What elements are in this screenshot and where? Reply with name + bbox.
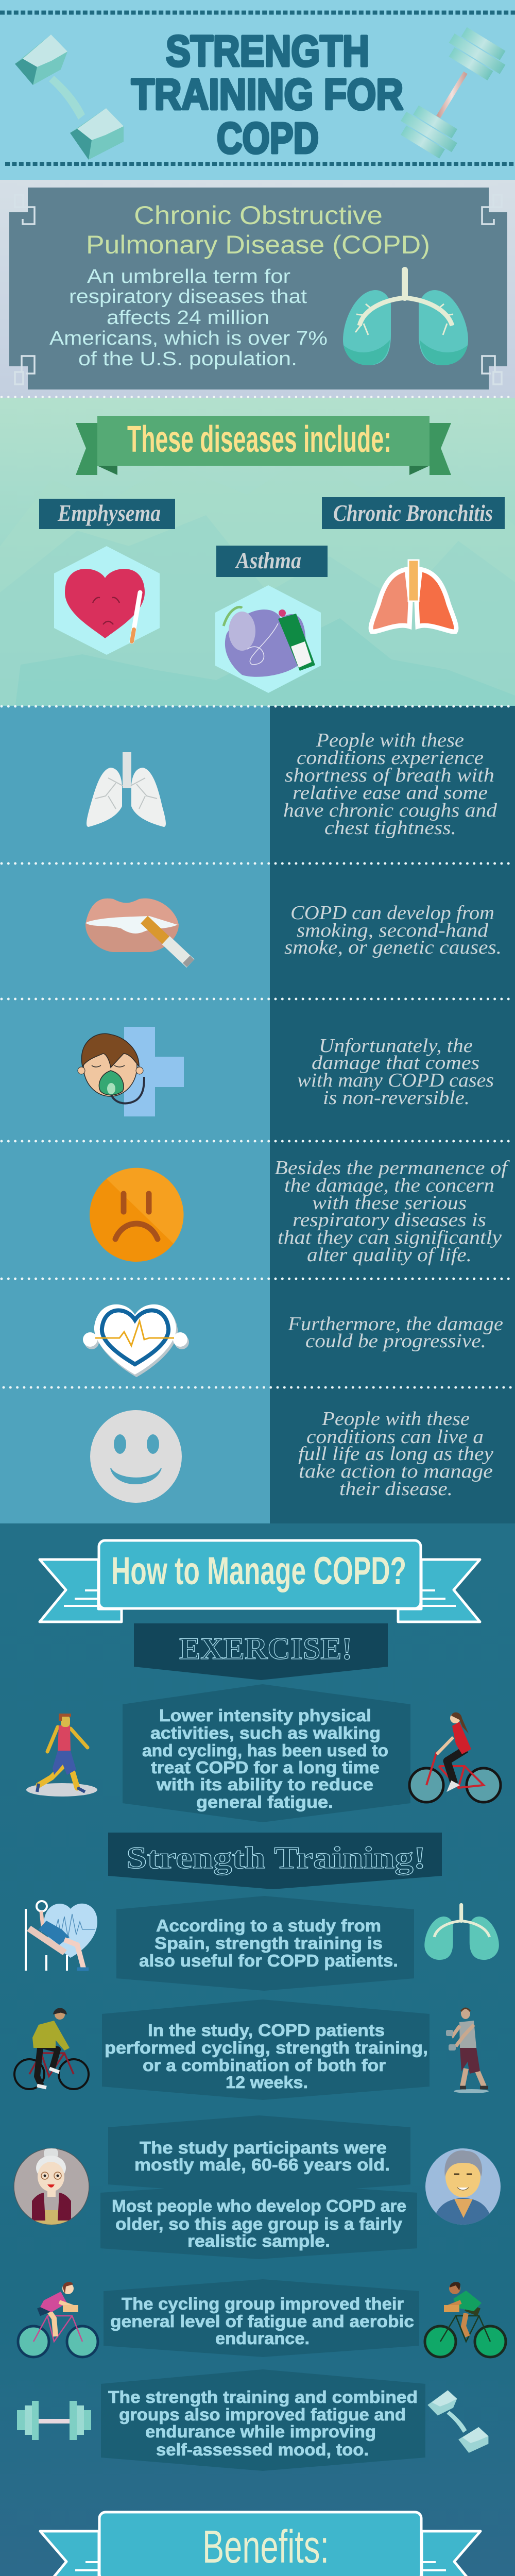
label: asthma: Asthma [234, 547, 301, 573]
heading: exercise: EXERCISE! [179, 1632, 352, 1666]
callout: strength group [101, 2369, 425, 2471]
text: progressive: could be progressive. [305, 1330, 486, 1352]
title [131, 27, 403, 162]
panel: header [0, 0, 515, 180]
text: causes: smoke, or genetic causes. [284, 937, 502, 958]
text: quality of life: the damage, the concern [284, 1175, 494, 1196]
callout: cycling group [104, 2279, 419, 2357]
text block: Americans, which is over 7% [49, 328, 328, 349]
text: quality of life: respiratory diseases is [293, 1209, 486, 1231]
text: causes: COPD can develop from [290, 902, 494, 924]
icon: cyclist pink [18, 2282, 98, 2357]
text: irreversible: damage that comes [312, 1052, 479, 1074]
callout: study design: In the study, COPD patients [148, 2021, 385, 2040]
panel: how to manage COPD [0, 1523, 515, 2576]
icon: heartbeat badge [83, 1304, 189, 1377]
icon: white lungs [87, 752, 166, 827]
panel: diseases [0, 397, 515, 706]
icon: man with oxygen mask [78, 1027, 184, 1116]
text: manage disease: their disease. [339, 1478, 453, 1500]
callout: realistic sample: older, so this age group is a fairly [115, 2214, 403, 2233]
icon: smile face [90, 1410, 182, 1503]
icon: barbell front [17, 2401, 91, 2440]
icon: sad face [90, 1168, 184, 1262]
heading: strength training: Strength Training! [126, 1841, 426, 1875]
callout: strength group: self-assessed mood, too. [156, 2440, 369, 2459]
icon: cyclist in red [409, 1713, 501, 1802]
text: manage disease [298, 1408, 493, 1500]
text: irreversible: Unfortunately, the [319, 1035, 473, 1057]
text: symptoms: shortness of breath with [285, 765, 494, 786]
icon: lungs [343, 270, 468, 365]
callout: study design: or a combination of both for [143, 2056, 386, 2075]
callout: lower intensity: with its ability to reduce [156, 1775, 373, 1794]
panel: COPD definition [0, 180, 515, 398]
icon: lungs small [424, 1905, 499, 1960]
callout: realistic sample [100, 2189, 417, 2259]
icon: bench press with heart [26, 1901, 97, 1971]
callout: study from Spain [116, 1896, 414, 1991]
text: symptoms: People with these [316, 730, 464, 751]
text: progressive: Furthermore, the damage [287, 1313, 503, 1335]
callout: lower intensity: and cycling, has been used to [142, 1741, 388, 1760]
icon: barbell [394, 23, 512, 162]
callout: study from Spain: also useful for COPD patients. [139, 1951, 398, 1970]
callout: cycling group: general level of fatigue and aerobic [110, 2312, 414, 2331]
icon: cyclist green [425, 2282, 506, 2357]
banner: benefits [40, 2512, 480, 2576]
callout: realistic sample: Most people who develop COPD are [112, 2196, 406, 2215]
icon: dumbbell [15, 35, 124, 160]
callout: strength group: endurance while improving [145, 2422, 376, 2441]
icon: walker [26, 1714, 97, 1797]
callout: study from Spain: According to a study from [156, 1916, 381, 1935]
callout: lower intensity [123, 1684, 410, 1822]
panel: facts rows [0, 706, 515, 1523]
callout: participants: The study participants were [140, 2138, 387, 2157]
callout: cycling group: endurance. [215, 2329, 310, 2348]
label: emphysema: Emphysema [57, 500, 161, 526]
text: symptoms: relative ease and some [293, 782, 488, 804]
callout: realistic sample: realistic sample. [187, 2231, 330, 2250]
text: manage disease: take action to manage [299, 1461, 493, 1482]
text: irreversible [297, 1035, 494, 1109]
text: irreversible: is non-reversible. [323, 1087, 470, 1109]
icon: lips with cigarette [85, 899, 191, 963]
text block: affects 24 million [107, 307, 269, 329]
callout: strength group: The strength training and combined [108, 2387, 418, 2406]
text: causes [284, 902, 502, 958]
callout: lower intensity: Lower intensity physical [159, 1706, 371, 1725]
text block: of the U.S. population. [78, 348, 297, 370]
callout: lower intensity: treat COPD for a long time [151, 1758, 380, 1777]
icon: cyclist in olive [14, 2009, 89, 2089]
text: quality of life: with these serious [312, 1192, 467, 1214]
text block [49, 266, 328, 370]
text: manage disease: conditions can live a [306, 1426, 484, 1448]
icon: older woman [14, 2146, 89, 2231]
banner: how to manage COPD [40, 1540, 480, 1622]
callout: participants: mostly male, 60-66 years old. [134, 2155, 390, 2174]
banner: these diseases include [76, 416, 451, 475]
heading: strength training [108, 1833, 442, 1889]
text block: respiratory diseases that [69, 286, 307, 308]
callout: study from Spain: Spain, strength training is [154, 1934, 383, 1953]
text: manage disease: full life as long as they [298, 1443, 493, 1465]
text: progressive [287, 1313, 503, 1352]
text: symptoms: have chronic coughs and [283, 800, 497, 821]
label: asthma [216, 546, 328, 577]
icon: man with dumbbells [446, 2008, 489, 2093]
callout: participants [108, 2115, 410, 2189]
text: quality of life: alter quality of life. [307, 1244, 472, 1266]
heading: exercise [134, 1623, 388, 1680]
text: manage disease: People with these [321, 1408, 470, 1430]
callout: cycling group: The cycling group improved their [122, 2294, 404, 2313]
icon: red lungs [371, 560, 456, 632]
title: COPD [217, 114, 319, 162]
text block: An umbrella term for [87, 266, 290, 287]
callout: study design: performed cycling, strength training, [105, 2038, 428, 2057]
callout: lower intensity: general fatigue. [196, 1792, 333, 1811]
callout: study design [102, 1999, 430, 2100]
icon: dumbbell light [427, 2391, 488, 2453]
title: TRAINING FOR [131, 70, 403, 118]
callout: study design: 12 weeks. [226, 2073, 308, 2092]
text: quality of life: Besides the permanence of [274, 1157, 510, 1179]
banner: benefits: Benefits: [202, 2521, 329, 2573]
text: quality of life [274, 1157, 510, 1266]
callout: strength group: groups also improved fatigue and [119, 2405, 406, 2424]
icon: older man [425, 2148, 501, 2226]
heading [86, 201, 430, 259]
heading: Chronic Obstructive [134, 201, 383, 230]
icon: asthma oxygen [215, 585, 321, 693]
text: symptoms: conditions experience [297, 747, 484, 769]
text: quality of life: that they can significantly [278, 1227, 502, 1248]
icon: sad heart [54, 546, 160, 655]
callout: lower intensity: activities, such as walking [150, 1723, 381, 1742]
text: causes: smoking, second-hand [297, 920, 489, 941]
text: symptoms [283, 730, 497, 839]
title: STRENGTH [166, 27, 369, 75]
text: symptoms: chest tightness. [324, 817, 456, 839]
heading: Pulmonary Disease (COPD) [86, 230, 430, 259]
text: irreversible: with many COPD cases [297, 1070, 494, 1091]
